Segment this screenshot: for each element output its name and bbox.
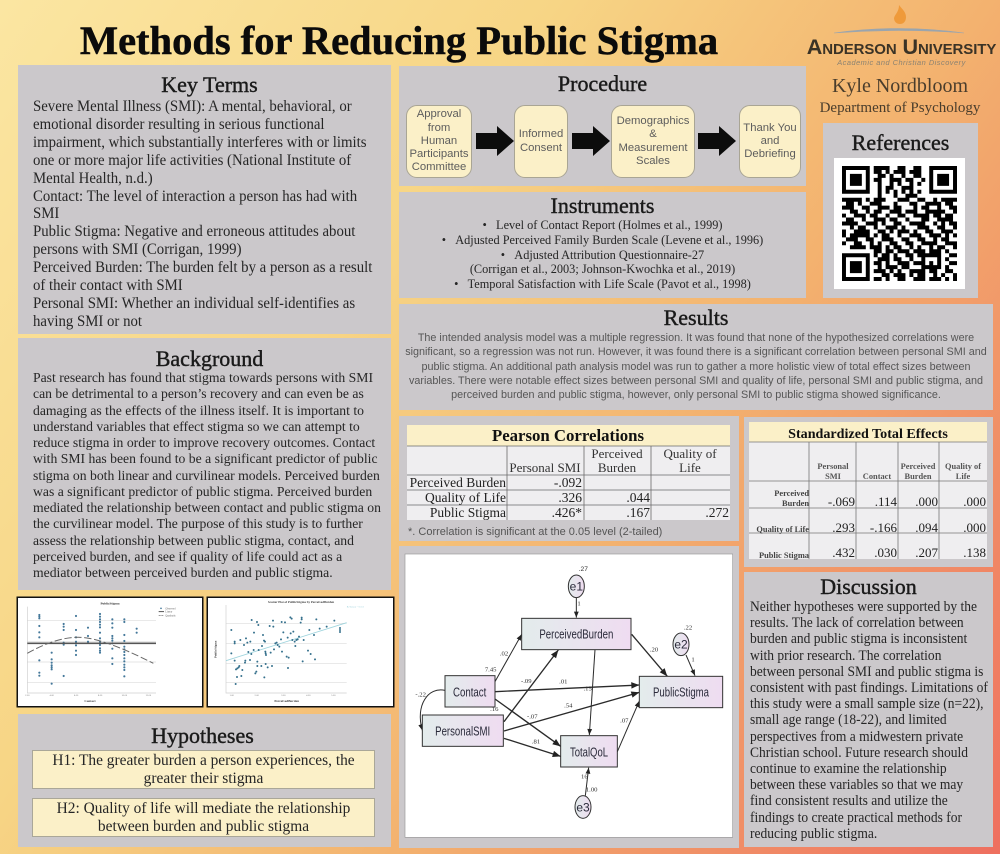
chart: scatter plot of public stigma by perceived burden: 5.00 [331,694,336,697]
panel: standardized total effects table: Public Stigma [759,551,810,560]
panel: standardized total effects table: Quality of [945,462,981,471]
heading: discussion: Discussion [820,574,917,599]
panel: hypotheses [18,714,391,847]
heading: instruments: Instruments [551,193,654,218]
path coefficients [415,566,695,794]
step: approval: Committee [412,161,466,173]
chart: public stigma by contact curve fit: Contact [84,699,97,703]
panel: pearson correlations table: .426* [552,505,582,520]
path coefficients: .54 [564,703,573,710]
instruments list [442,218,763,291]
key terms definitions: Contact: The level of interaction a person has had with [33,188,357,205]
discussion text: burden and public stigma is inconsistent [750,631,967,647]
panel: pearson correlations table: Quality of Life [425,490,506,505]
key terms definitions: impairment, which substantially interferes with or limits [33,134,366,151]
panel: standardized total effects table: .432 [832,545,855,560]
background text: Past research has found that stigma towards persons with SMI [33,371,373,386]
key terms definitions: Severe Mental Illness (SMI): A mental, behavioral, or [33,98,352,115]
node: Contact [445,676,495,707]
background text: understand variables that effect stigma so we can attempt to [33,420,360,435]
error term e3: e3 [576,800,590,814]
background text: mediated the relationship between contact and public stigma on [33,501,381,516]
step: demographics and scales: Demographics [617,115,689,127]
QR code [834,158,965,289]
panel: standardized total effects table: .030 [874,545,897,560]
chart: public stigma by contact curve fit [18,598,202,706]
hypothesis 1 [32,750,375,789]
step: approval: from [428,122,450,134]
results text: perceived burden and public stigma, however, only personal SMI to public stigma showed significance. [451,389,941,401]
step: approval: Approval [417,108,461,120]
panel: key terms [18,65,391,334]
panel: pearson correlations table: Public Stigma [430,505,506,520]
panel: pearson correlations table: .272 [705,505,729,520]
hypothesis 2: between burden and public stigma [98,818,309,835]
heading: key terms: Key Terms [161,72,258,97]
panel: standardized total effects table [744,417,993,567]
tagline: Academic and Christian Discovery [837,58,966,67]
path coefficients: .07 [620,717,629,724]
step: demographics and scales [611,105,695,178]
icon: flame and arc [834,5,964,34]
panel: path analysis diagram [399,546,739,848]
hypothesis 2: H2: Quality of life will mediate the relationship [57,800,350,817]
panel: background [18,338,391,590]
path coefficients: 1.00 [586,787,598,794]
background text: damaging as the effects of the illness itself. It is important to [33,404,364,418]
instruments list: • Adjusted Attribution Questionnaire-27 [501,248,704,262]
author name: Kyle Nordbloom [832,75,968,97]
panel: standardized total effects table: .000 [963,494,986,509]
discussion text: between these variables so that we may [750,777,963,793]
key terms definitions: SMI [33,205,59,222]
panel: pearson correlations table: Life [679,460,701,475]
path coefficients: .22 [684,625,692,632]
panel: standardized total effects table: Standardized Total Effects [788,426,948,442]
chart: public stigma by contact curve fit: Quadratic [165,614,177,617]
path coefficients: 1 [691,657,695,664]
step: approval [406,105,472,178]
panel: standardized total effects table: Life [956,472,970,481]
discussion text: Neither hypotheses were supported by the [750,599,977,615]
arrow 2 [572,126,610,156]
panel: standardized total effects table: SMI [825,472,841,481]
discussion text: small age range (18-22), and limited [750,712,947,728]
chart: scatter plot of public stigma by perceived burden: PerceivedBurden [274,699,299,703]
department: Department of Psychology [820,100,980,116]
arrow 1 [476,126,514,156]
panel: pearson correlations table: Burden [598,460,637,475]
panel: instruments [399,192,806,298]
path coefficients: -.09 [521,678,532,685]
step: informed consent [514,105,568,178]
error term e1 [568,575,584,598]
panel: procedure [399,66,806,186]
heading: references: References [852,130,949,155]
logo: Anderson University [807,5,996,67]
panel: standardized total effects table: Burden [904,472,932,481]
chart: public stigma by contact curve fit: 6.00 [74,694,79,697]
arrow 3 [698,126,736,156]
panel: pearson correlations table: Quality of [663,446,717,461]
chart: scatter plot of public stigma by perceived burden: 3.00 [281,694,286,697]
panel: pearson correlations table [399,416,739,541]
panel: standardized total effects table: .138 [963,545,986,560]
chart: public stigma by contact curve fit: 2.00 [25,694,30,697]
node: PerceivedBurden [522,618,631,650]
chart: public stigma by contact curve fit: 10.00 [122,694,128,697]
panel: standardized total effects table: .114 [875,494,897,509]
results text: public stigma. An additional path analysis model was run to gather a more holistic view of total effect sizes between [422,361,970,373]
path coefficients: .02 [500,650,508,657]
node: PublicStigma: PublicStigma [653,686,710,700]
panel: pearson correlations table: .167 [626,505,650,520]
path coefficients: 7.45 [485,667,497,674]
background text [33,371,381,581]
instruments list: (Corrigan et al., 2003; Johnson-Kwochka et al., 2019) [470,262,735,276]
path coefficients: .20 [650,647,659,654]
discussion text: Christian school. Future research should [750,745,968,761]
step: thank you and debriefing: and [761,135,779,147]
panel: pearson correlations table: *. Correlation is significant at the 0.05 level (2-tailed) [408,526,662,538]
background text: reduce stigma in order to improve recovery outcomes. Contact [33,436,375,451]
error term e2 [673,633,689,656]
chart: scatter plot of public stigma by perceived burden: 2.00 [254,694,260,697]
heading: results: Results [664,305,728,330]
error term e1: e1 [570,580,583,594]
chart: scatter plot of public stigma by perceived burden: PublicStigma [213,640,217,658]
panel: standardized total effects table: Personal [817,462,849,471]
step: informed consent: Consent [520,142,562,154]
key terms definitions: Mental Health, n.d.) [33,170,153,187]
background text: with SMI has been found to be a significant predictor of public [33,452,378,467]
path coefficients: .16 [490,706,499,713]
panel: pearson correlations table: Personal SMI [509,460,581,475]
background text: can be detrimental to a person’s recovery and can even be as [33,387,364,402]
results text: The intended analysis model was a multiple regression. It was found that none of the hypothesized correlations were [418,332,974,344]
instruments list: • Temporal Satisfaction with Life Scale (Pavot et al., 1998) [454,277,751,291]
node: PersonalSMI [422,715,503,746]
path coefficients: .01 [559,678,567,685]
chart: public stigma by contact curve fit: 12.00 [146,694,152,697]
key terms definitions: of their contact with SMI [33,277,183,294]
panel: pearson correlations table: Perceived [591,446,643,461]
step: approval: Participants [409,148,469,160]
step: thank you and debriefing: Thank You [743,122,797,134]
background text: the curvilinear model. The purpose of this study is to further [33,517,363,532]
panel: standardized total effects table: Perceived [774,489,809,498]
step: thank you and debriefing [739,105,801,178]
key terms definitions: having SMI or not [33,313,142,330]
hypothesis 1: greater their stigma [144,770,263,787]
step: demographics and scales: & [649,128,657,140]
chart: public stigma by contact curve fit: Linear [165,611,172,614]
error term e3 [575,796,591,818]
discussion text: this study were a small sample size (n=22), [750,696,984,712]
panel: standardized total effects table: Burden [782,499,809,508]
key terms definitions [33,98,372,330]
panel: discussion [744,572,993,847]
panel: standardized total effects table: .293 [832,520,855,535]
university name: Anderson University [807,34,996,59]
panel: standardized total effects table: Perceived [901,462,936,471]
panel: pearson correlations table: -.092 [554,475,582,490]
panel: standardized total effects table: -.166 [870,520,897,535]
discussion text: between personal SMI and public stigma is [750,664,983,680]
instruments list: • Adjusted Perceived Family Burden Scale (Levene et al., 1996) [442,233,763,247]
background text: assess the relationship between public stigma, contact, and [33,534,354,548]
discussion text: reducing public stigma. [750,826,877,842]
node: TotalQoL: TotalQoL [570,745,608,759]
panel: standardized total effects table: .207 [915,545,938,560]
path coefficients: -.22 [415,692,426,699]
chart: scatter plot of public stigma by perceived burden [208,598,393,706]
path coefficients: .81 [532,738,540,745]
step: demographics and scales: Measurement [618,142,688,154]
instruments list: • Level of Contact Report (Holmes et al., 1999) [483,218,722,232]
panel: standardized total effects table: .000 [915,494,938,509]
discussion text: consistent with past findings. Limitations of [750,680,988,696]
background text: perceived burden, and see if quality of life could act as a [33,550,342,565]
chart: public stigma by contact curve fit: Observed [165,607,176,610]
panel: standardized total effects table: -.069 [828,494,855,509]
background text: mediator between perceived burden and public stigma. [33,566,333,581]
key terms definitions: Personal SMI: Whether an individual self-identifies as [33,295,355,312]
chart: scatter plot of public stigma by perceived burden: 4.00 [306,694,311,697]
path coefficients: .27 [579,566,588,573]
error term e2: e2 [674,638,688,652]
path coefficients: 16 [581,773,588,780]
hypothesis 2 [32,798,375,837]
step: thank you and debriefing: Debriefing [744,148,796,160]
key terms definitions: emotional disorder resulting in serious functional [33,116,325,133]
discussion text: continue to examine the relationship [750,761,947,777]
discussion text: with prior research. The correlation [750,648,941,664]
discussion text [750,599,988,842]
panel: pearson correlations table: .326 [558,490,582,505]
step: demographics and scales: Scales [636,155,670,167]
node: PerceivedBurden: PerceivedBurden [539,627,613,641]
panel: standardized total effects table: Quality of Life [756,525,809,534]
results text: significant, so a regression was not run. However, it was found there is a significant correlation between personal SMI and [405,346,987,358]
path coefficients: 1 [577,601,581,608]
key terms definitions: persons with SMI (Corrigan, 1999) [33,241,241,258]
background text: stigma on both linear and curvilinear models. Perceived burden [33,468,380,484]
discussion text: perspectives from a midwestern private [750,729,963,745]
title: Methods for Reducing Public Stigma [80,18,718,63]
panel: pearson correlations table: Perceived Burden [410,475,506,490]
panel: results [399,304,993,410]
step: approval: Human [421,135,457,147]
step: informed consent: Informed [519,128,563,140]
panel: standardized total effects table: Contact [863,472,891,481]
results text: variables. There were notable effect sizes between personal SMI and quality of life, personal SMI and public stigma, and [409,375,983,387]
chart: public stigma by contact curve fit: 4.00 [49,694,55,697]
panel: standardized total effects table: .000 [963,520,986,535]
hypothesis 1: H1: The greater burden a person experiences, the [52,752,355,769]
heading: procedure: Procedure [558,71,647,96]
panel: pearson correlations table: .044 [626,490,650,505]
panel: pearson correlations table: Pearson Correlations [492,426,645,445]
background text: was a significant predictor of public stigma. Perceived burden [33,485,372,500]
panel: references [823,123,978,298]
chart: scatter plot of public stigma by perceived burden: Scatter Plot of PublicStigma by PerceivedBurden [268,600,334,604]
key terms definitions: Public Stigma: Negative and erroneous attitudes about [33,223,355,240]
results text [405,332,987,401]
chart: scatter plot of public stigma by perceived burden: 1.00 [229,694,235,697]
chart: public stigma by contact curve fit: PublicStigma [100,602,120,606]
node: TotalQoL [561,736,617,767]
chart: public stigma by contact curve fit: 8.00 [98,694,103,697]
node: PublicStigma [639,676,723,708]
chart: scatter plot of public stigma by perceived burden: R2 Linear = 0.151 [347,606,365,609]
path coefficients: -.07 [527,713,538,720]
discussion text: results. The lack of correlation between [750,615,964,631]
node: PersonalSMI: PersonalSMI [435,725,490,739]
path coefficients: .15 [584,685,592,692]
heading: hypotheses: Hypotheses [151,723,254,748]
panel: standardized total effects table: .094 [915,520,938,535]
node: Contact: Contact [453,685,487,699]
heading: background: Background [156,346,263,371]
discussion text: find consistent results and utilize the [750,793,948,809]
discussion text: findings to create practical methods for [750,810,962,826]
key terms definitions: Perceived Burden: The burden felt by a person as a result [33,259,372,276]
key terms definitions: one or more major life activities (National Institute of [33,152,351,169]
